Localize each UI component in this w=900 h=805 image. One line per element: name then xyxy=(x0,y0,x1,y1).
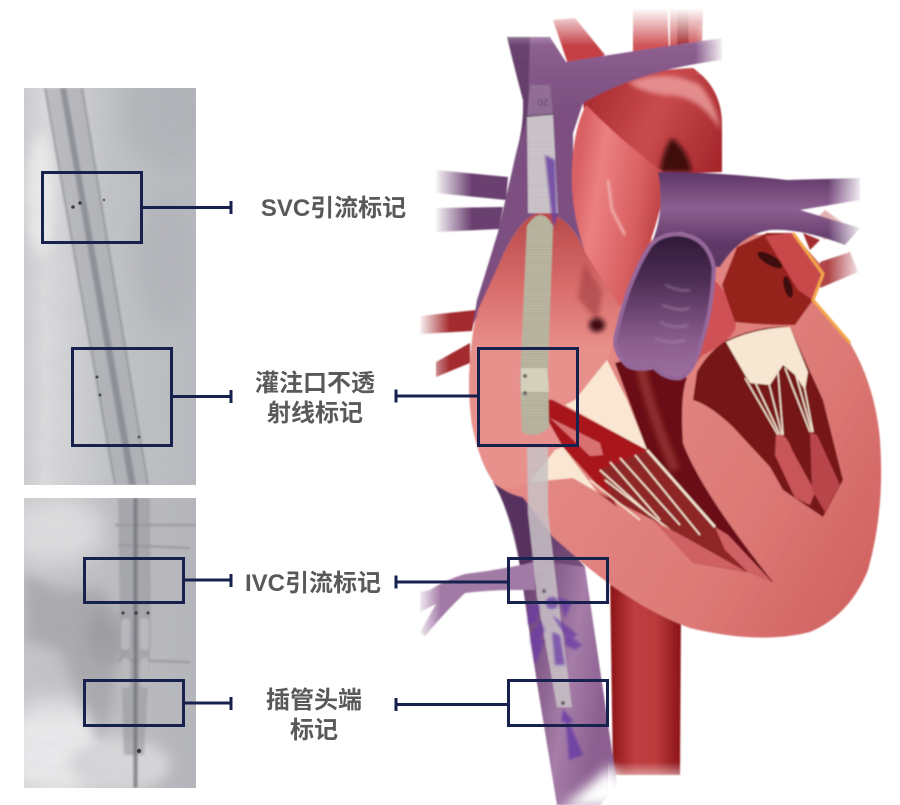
highlights on aorta xyxy=(608,180,625,235)
tricuspid cream tissue xyxy=(530,360,647,492)
tricuspid main chord xyxy=(647,450,715,527)
inferior vena cava xyxy=(493,482,617,805)
fade: vessel ends xyxy=(416,0,864,805)
purple flow in vena cava xyxy=(545,155,557,228)
left ventricular cavity xyxy=(693,327,843,517)
catheter depth marker xyxy=(527,96,554,116)
pulmonary veins, left xyxy=(420,170,508,377)
vena cava shading xyxy=(507,37,530,172)
label: infusion port radiopaque marker: 射线标记 xyxy=(267,400,363,427)
fluoroscopy image: lower xyxy=(24,498,196,788)
descending aorta xyxy=(610,575,681,775)
catheter depth marker: 20 xyxy=(537,96,549,107)
heart body xyxy=(469,233,881,638)
label: infusion port radiopaque marker: 灌注口不透 xyxy=(255,370,375,397)
label: SVC drainage marker: SVC引流标记 xyxy=(261,195,406,222)
heart illustration xyxy=(420,0,881,805)
hepatic vein branches xyxy=(420,562,535,636)
pulmonary ridge highlights xyxy=(655,285,690,342)
red tricuspid leaflet xyxy=(535,398,647,507)
ascending aorta xyxy=(572,105,663,307)
catheter in right atrium xyxy=(520,215,553,435)
fluoroscopy image: upper xyxy=(24,88,196,485)
right ventricle chamber xyxy=(597,359,773,582)
pulmonary artery xyxy=(653,172,860,267)
superior vena cava and brachiocephalic vein xyxy=(473,37,722,325)
arch branch vessels xyxy=(553,0,703,70)
tricuspid chordae xyxy=(590,455,700,535)
catheter below atrium xyxy=(527,447,572,707)
label: IVC drainage marker: IVC引流标记 xyxy=(245,570,381,597)
faint catheter tip above marker xyxy=(527,85,553,117)
catheter ports xyxy=(523,374,565,705)
catheter outflow section xyxy=(521,368,549,392)
left atrium xyxy=(722,233,850,343)
label: cannula tip marker: 插管头端 xyxy=(266,687,362,714)
catheter in vena cava xyxy=(527,115,558,213)
aortic arch xyxy=(583,68,722,175)
callout boxes and connectors: heart xyxy=(396,348,608,726)
label: cannula tip marker: 标记 xyxy=(290,717,338,744)
pulmonary veins, right xyxy=(803,210,858,288)
bottom flow arrow xyxy=(561,709,583,760)
drainage flow arrows xyxy=(528,597,582,665)
mitral valve and chordae xyxy=(726,327,840,512)
right atrium xyxy=(469,212,620,488)
pulmonary trunk opening xyxy=(615,234,714,378)
callout boxes and connectors: fluoroscopy xyxy=(42,172,231,726)
papillary muscles xyxy=(653,520,773,583)
